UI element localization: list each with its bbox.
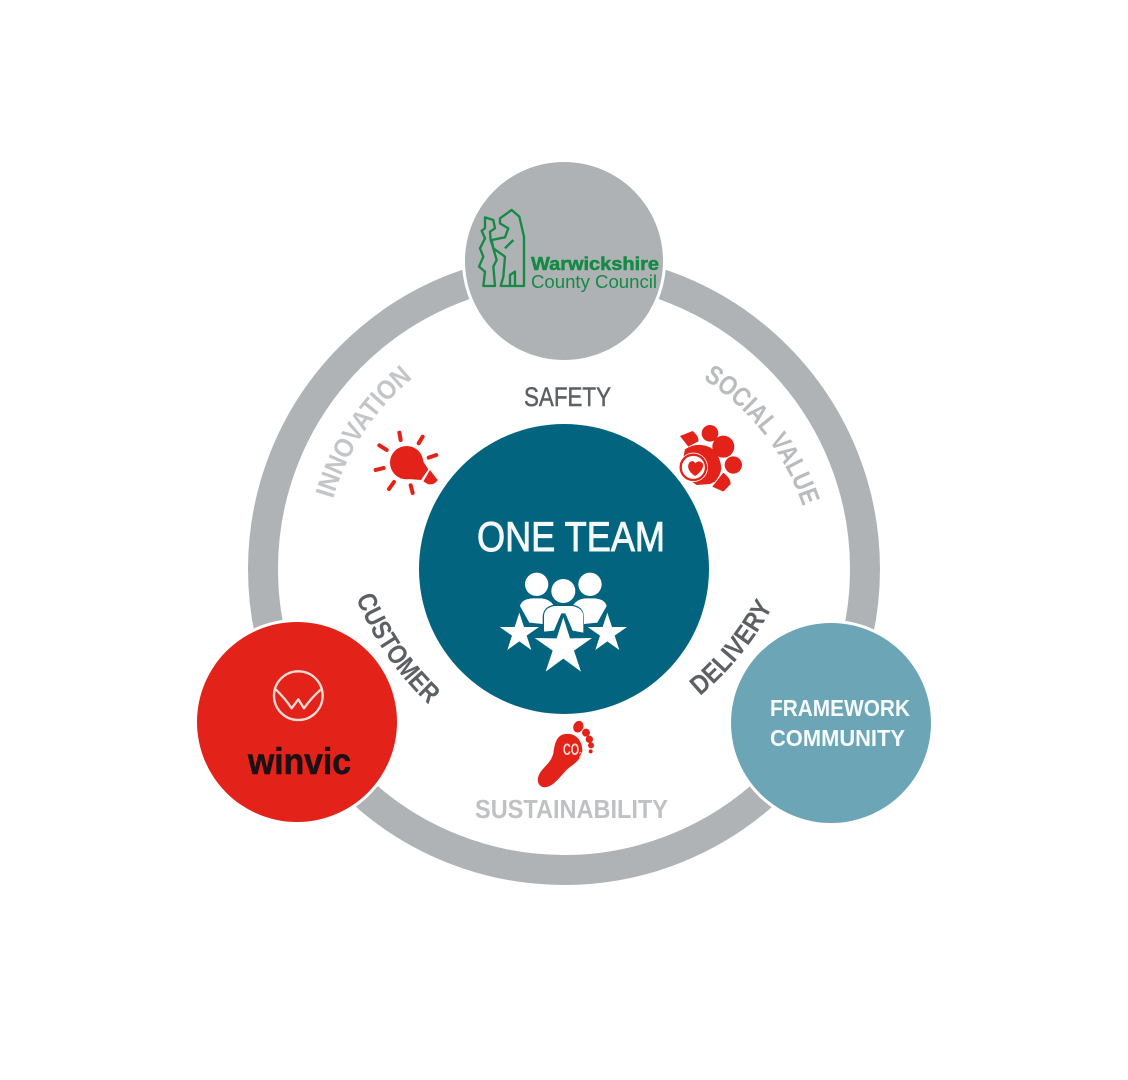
- value label: delivery: DELIVERY: [688, 598, 770, 696]
- value label: customer: CUSTOMER: [358, 594, 439, 704]
- outer grey ring: [263, 268, 865, 870]
- blue partner circle: framework community: [728, 620, 934, 826]
- council name: Warwickshire: [531, 254, 659, 274]
- centre circle: one team: [419, 424, 709, 714]
- icon: bear and ragged staff: [479, 210, 524, 287]
- value label: sustainability: SUSTAINABILITY: [475, 794, 668, 824]
- winvic wordmark: winvic: [247, 741, 351, 782]
- grey partner circle: Warwickshire County Council: [462, 159, 666, 363]
- icon: winvic logo mark: [274, 671, 323, 720]
- centre heading: ONE TEAM: [477, 513, 665, 560]
- grey partner circle: Warwickshire County Council: County Council: [531, 272, 657, 292]
- label: framework community: COMMUNITY: [770, 725, 905, 751]
- label: framework community: [770, 695, 910, 751]
- co2 label: 2: [579, 751, 582, 760]
- icon: light bulb: [376, 433, 438, 493]
- value label: social value: SOCIAL VALUE: [706, 366, 820, 506]
- icon: social value hand: [679, 425, 742, 492]
- label: framework community: FRAMEWORK: [770, 695, 910, 721]
- icon: team with stars: [500, 573, 627, 672]
- red partner circle: Winvic: [194, 619, 400, 825]
- icon: carbon footprint: [538, 719, 594, 787]
- value label: innovation: INNOVATION: [316, 365, 412, 498]
- value label: safety: SAFETY: [524, 382, 611, 412]
- co2 label: CO: [563, 740, 588, 759]
